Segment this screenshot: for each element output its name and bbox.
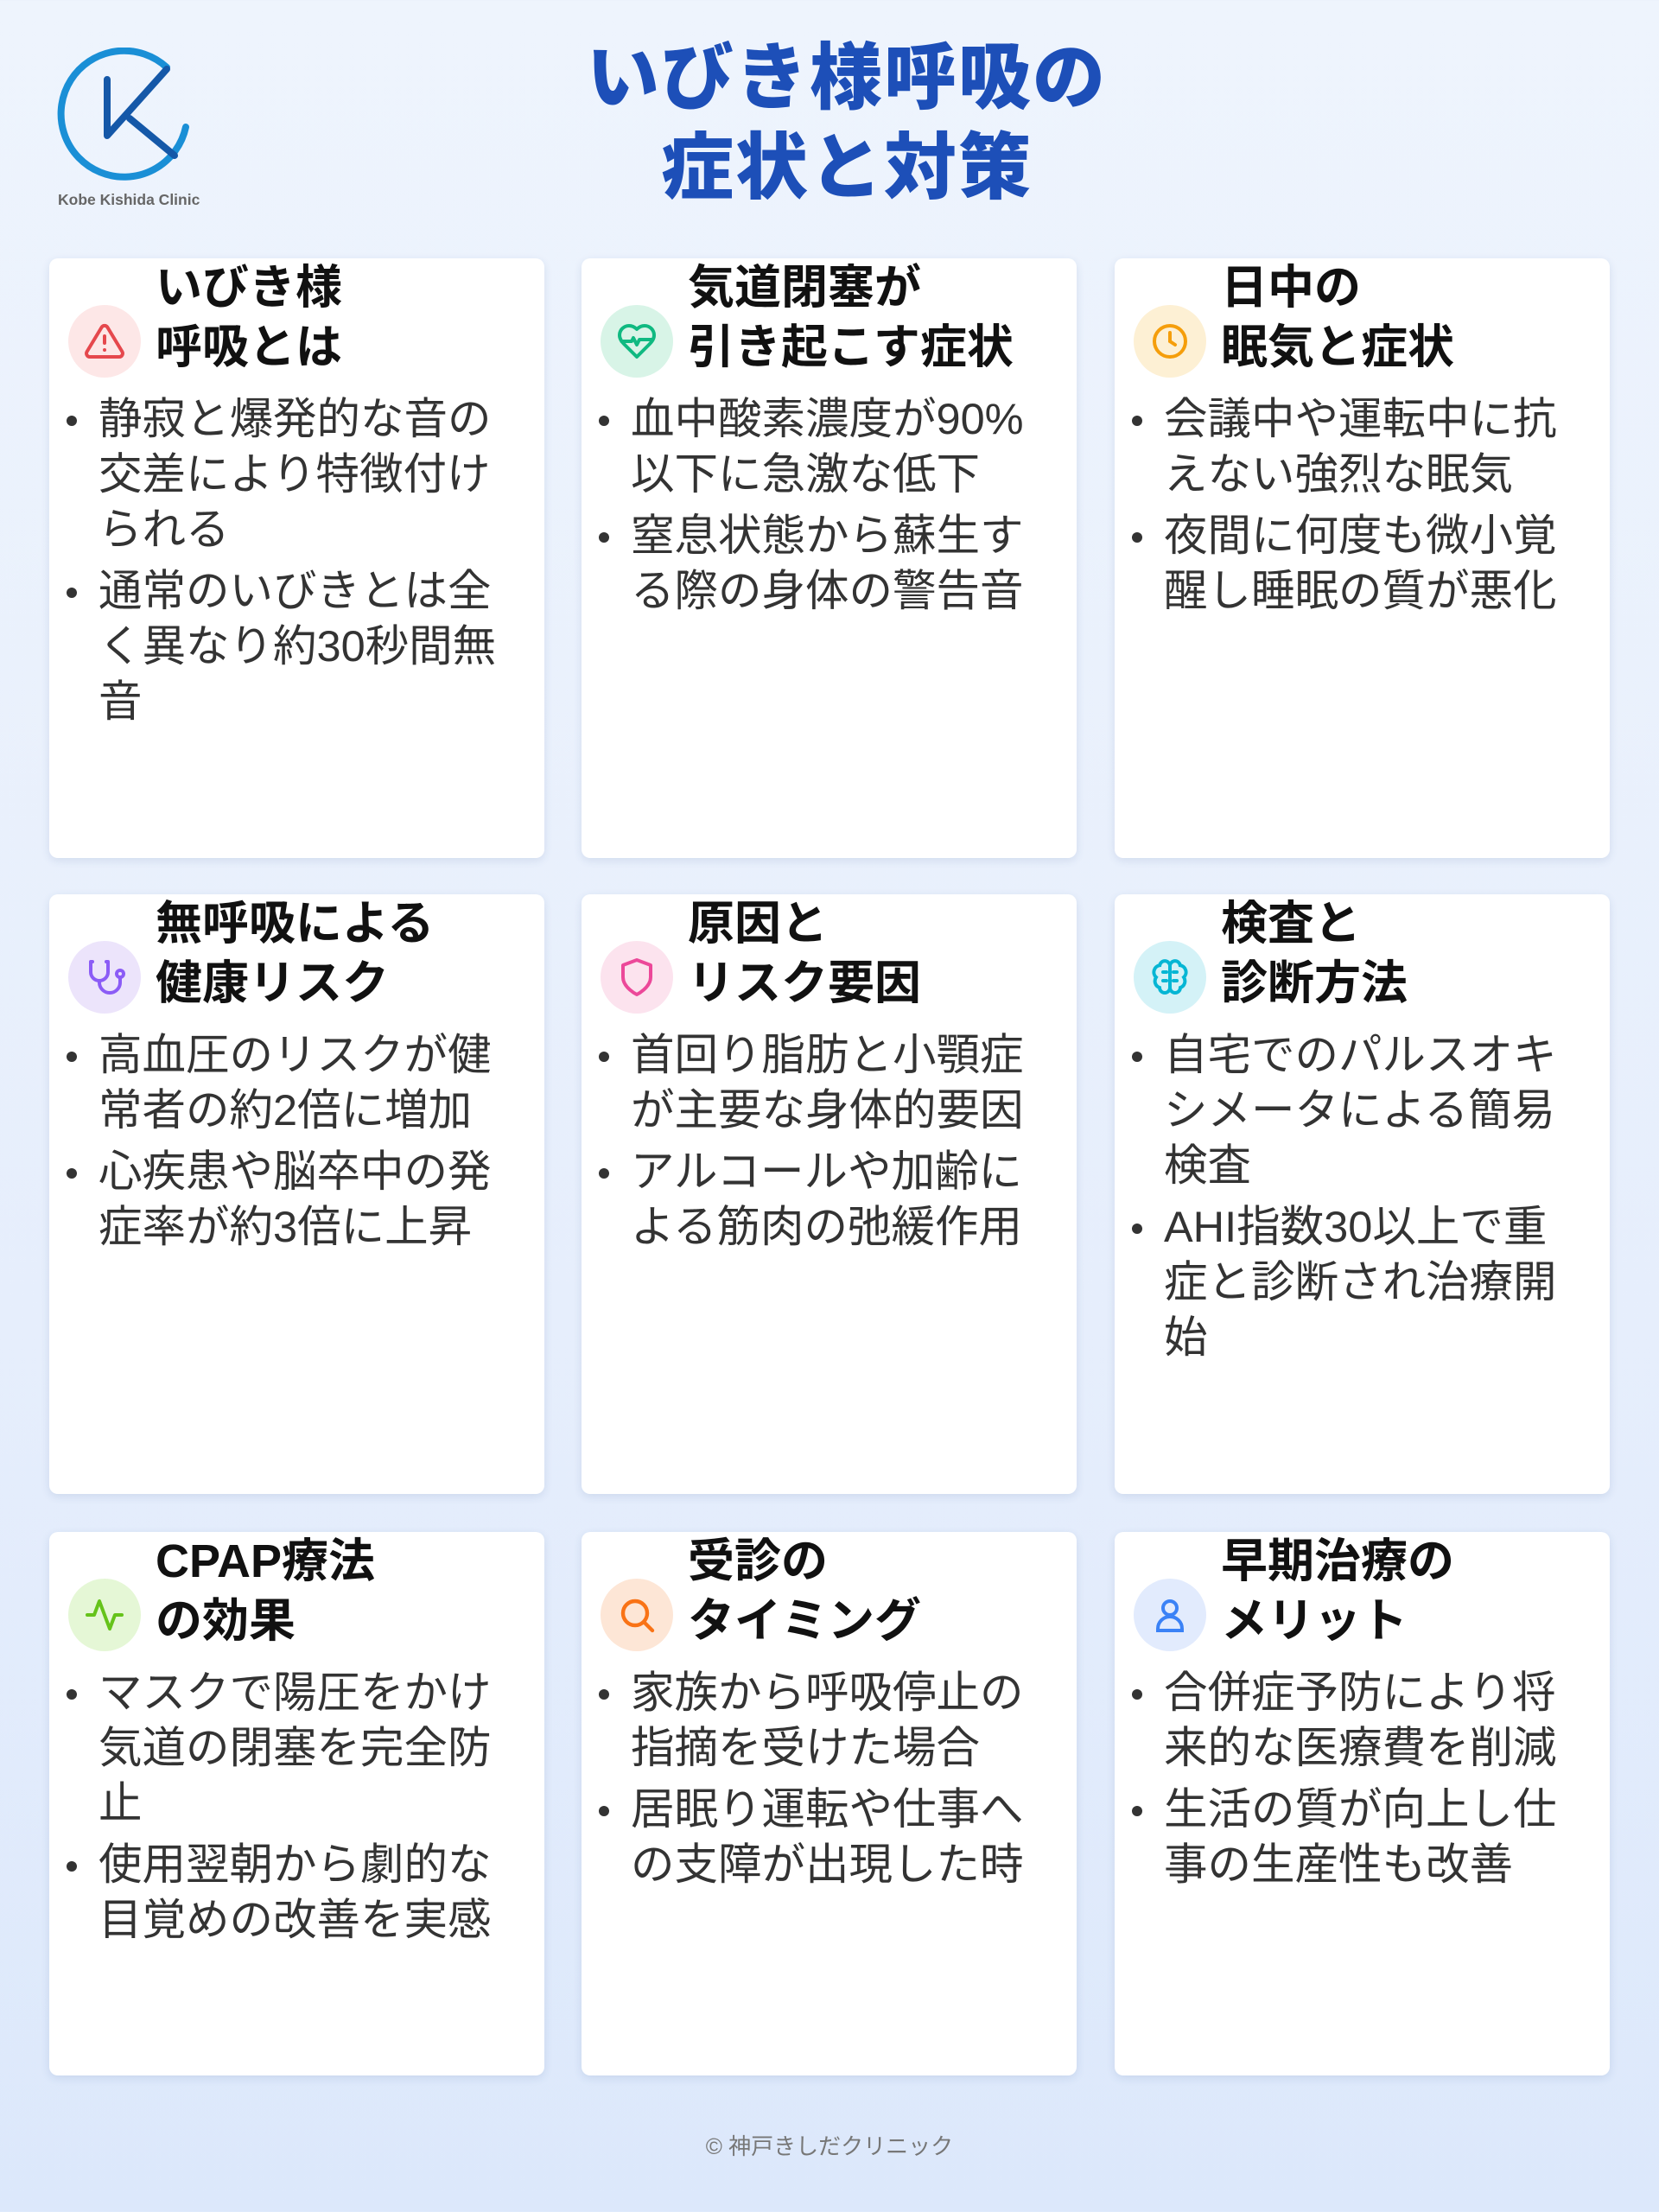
heading bbox=[1221, 898, 1408, 1009]
bullets: えない強烈な眠気 bbox=[1164, 449, 1513, 499]
heading: 検査と bbox=[1221, 898, 1361, 950]
bullets: 音 bbox=[99, 677, 142, 726]
bullets: 目覚めの改善を実感 bbox=[99, 1895, 491, 1944]
panel: 受診のタイミング bbox=[582, 1532, 1077, 2075]
panel: 日中の眠気 bbox=[1115, 258, 1610, 858]
bullets: 来的な医療費を削減 bbox=[1164, 1723, 1557, 1772]
bullets: 検査 bbox=[1164, 1141, 1251, 1190]
logo bbox=[57, 48, 200, 208]
heading: いびき様 bbox=[156, 262, 342, 314]
bullets: マスクで陽圧をかけ bbox=[99, 1668, 491, 1717]
heading bbox=[156, 1535, 375, 1647]
bullets: 交差により特徴付け bbox=[99, 449, 491, 499]
heading: 気道閉塞が bbox=[688, 262, 921, 314]
heading: タイミング bbox=[688, 1595, 921, 1647]
bullets: の支障が出現した時 bbox=[631, 1840, 1023, 1889]
bullets: 家族から呼吸停止の bbox=[631, 1668, 1023, 1717]
heading: 呼吸とは bbox=[156, 321, 342, 373]
bullets: 醒し睡眠の質が悪化 bbox=[1164, 566, 1557, 615]
panel: 早期治療のメリット bbox=[1115, 1532, 1610, 2075]
title: 症状と対策 bbox=[661, 127, 1033, 208]
heading bbox=[688, 898, 921, 1009]
bullets: 生活の質が向上し仕 bbox=[1164, 1784, 1557, 1834]
icon: brain bbox=[1134, 941, 1206, 1014]
bullets bbox=[67, 1030, 491, 1251]
bullets bbox=[599, 1668, 1023, 1889]
icon: warning bbox=[68, 305, 141, 378]
bullets: シメータによる簡易 bbox=[1164, 1085, 1555, 1135]
bullets: 以下に急激な低下 bbox=[631, 449, 980, 499]
bullets: アルコールや加齢に bbox=[631, 1147, 1022, 1196]
footer: © 神戸きしだクリニック bbox=[706, 2133, 953, 2159]
bullets: 静寂と爆発的な音の bbox=[99, 394, 491, 443]
panel: 検査と診断方法 bbox=[1115, 894, 1610, 1494]
bullets: る際の身体の警告音 bbox=[631, 566, 1023, 615]
bullets: 窒息状態から蘇生す bbox=[631, 511, 1023, 560]
title: いびき様呼吸の bbox=[587, 37, 1107, 118]
heading bbox=[688, 262, 1014, 373]
bullets: 通常のいびきとは全 bbox=[99, 566, 491, 615]
heading bbox=[1221, 1535, 1454, 1647]
bullets: 症率が約3倍に上昇 bbox=[99, 1202, 472, 1251]
bullets: 常者の約2倍に増加 bbox=[99, 1085, 472, 1135]
heading bbox=[688, 1535, 921, 1647]
heading: CPAP療法 bbox=[156, 1535, 375, 1587]
icon: heart pulse bbox=[601, 305, 673, 378]
bullets: 事の生産性も改善 bbox=[1164, 1840, 1513, 1889]
heading: 原因と bbox=[688, 898, 828, 950]
heading: 眠気と症状 bbox=[1221, 321, 1454, 373]
panel: 健康リスク bbox=[49, 894, 544, 1494]
heading: 早期治療の bbox=[1221, 1535, 1454, 1587]
bullets: られる bbox=[99, 505, 230, 554]
panel: いびき様呼吸とは bbox=[49, 258, 544, 858]
icon: user bbox=[1134, 1579, 1206, 1651]
heading: 健康リスク bbox=[156, 957, 389, 1009]
bullets: 心疾患や脳卒中の発 bbox=[99, 1147, 491, 1196]
panel: 原因とリスク要因 bbox=[582, 894, 1077, 1494]
bullets: 始 bbox=[1164, 1313, 1208, 1362]
heading: メリット bbox=[1221, 1595, 1408, 1647]
bullets: 居眠り運転や仕事へ bbox=[631, 1784, 1023, 1834]
heading: 引き起こす症状 bbox=[688, 321, 1014, 373]
bullets bbox=[1132, 394, 1557, 615]
bullets: 夜間に何度も微小覚 bbox=[1164, 511, 1557, 560]
bullets: 止 bbox=[99, 1778, 142, 1827]
heading bbox=[156, 262, 342, 373]
heading: リスク要因 bbox=[688, 957, 921, 1009]
bullets: 症と診断され治療開 bbox=[1164, 1257, 1557, 1306]
bullets: 使用翌朝から劇的な bbox=[99, 1840, 491, 1889]
bullets bbox=[599, 1030, 1023, 1251]
bullets bbox=[67, 394, 496, 726]
heading bbox=[156, 898, 434, 1009]
bullets bbox=[599, 394, 1024, 615]
panel: 気道閉塞 bbox=[582, 258, 1077, 858]
heading: の効果 bbox=[156, 1595, 296, 1647]
icon: shield bbox=[601, 941, 673, 1014]
icon: clock bbox=[1134, 305, 1206, 378]
bullets: 指摘を受けた場合 bbox=[631, 1723, 980, 1772]
bullets bbox=[1132, 1668, 1557, 1889]
heading: 受診の bbox=[688, 1535, 828, 1587]
bullets: く異なり約30秒間無 bbox=[99, 621, 496, 671]
bullets: 気道の閉塞を完全防 bbox=[99, 1723, 491, 1772]
bullets: 会議中や運転中に抗 bbox=[1164, 394, 1557, 443]
bullets: 高血圧のリスクが健 bbox=[99, 1030, 491, 1079]
heading: 診断方法 bbox=[1221, 957, 1408, 1009]
bullets bbox=[1132, 1030, 1557, 1362]
heading: 日中の bbox=[1221, 262, 1361, 314]
bullets: が主要な身体的要因 bbox=[631, 1085, 1023, 1135]
panel: CPAP療法 bbox=[49, 1532, 544, 2075]
bullets: 首回り脂肪と小顎症 bbox=[631, 1030, 1023, 1079]
bullets: 血中酸素濃度が90% bbox=[631, 394, 1024, 443]
bullets: 自宅でのパルスオキ bbox=[1164, 1030, 1557, 1079]
bullets: よる筋肉の弛緩作用 bbox=[631, 1202, 1022, 1251]
bullets: AHI指数30以上で重 bbox=[1164, 1202, 1547, 1251]
bullets bbox=[67, 1668, 491, 1944]
bullets: 合併症予防により将 bbox=[1164, 1668, 1555, 1717]
title bbox=[587, 37, 1107, 208]
icon: search bbox=[601, 1579, 673, 1651]
heading bbox=[1221, 262, 1454, 373]
icon: activity bbox=[68, 1579, 141, 1651]
logo: Kobe Kishida Clinic bbox=[58, 191, 200, 208]
heading: 無呼吸による bbox=[156, 898, 434, 950]
icon: stethoscope bbox=[68, 941, 141, 1014]
